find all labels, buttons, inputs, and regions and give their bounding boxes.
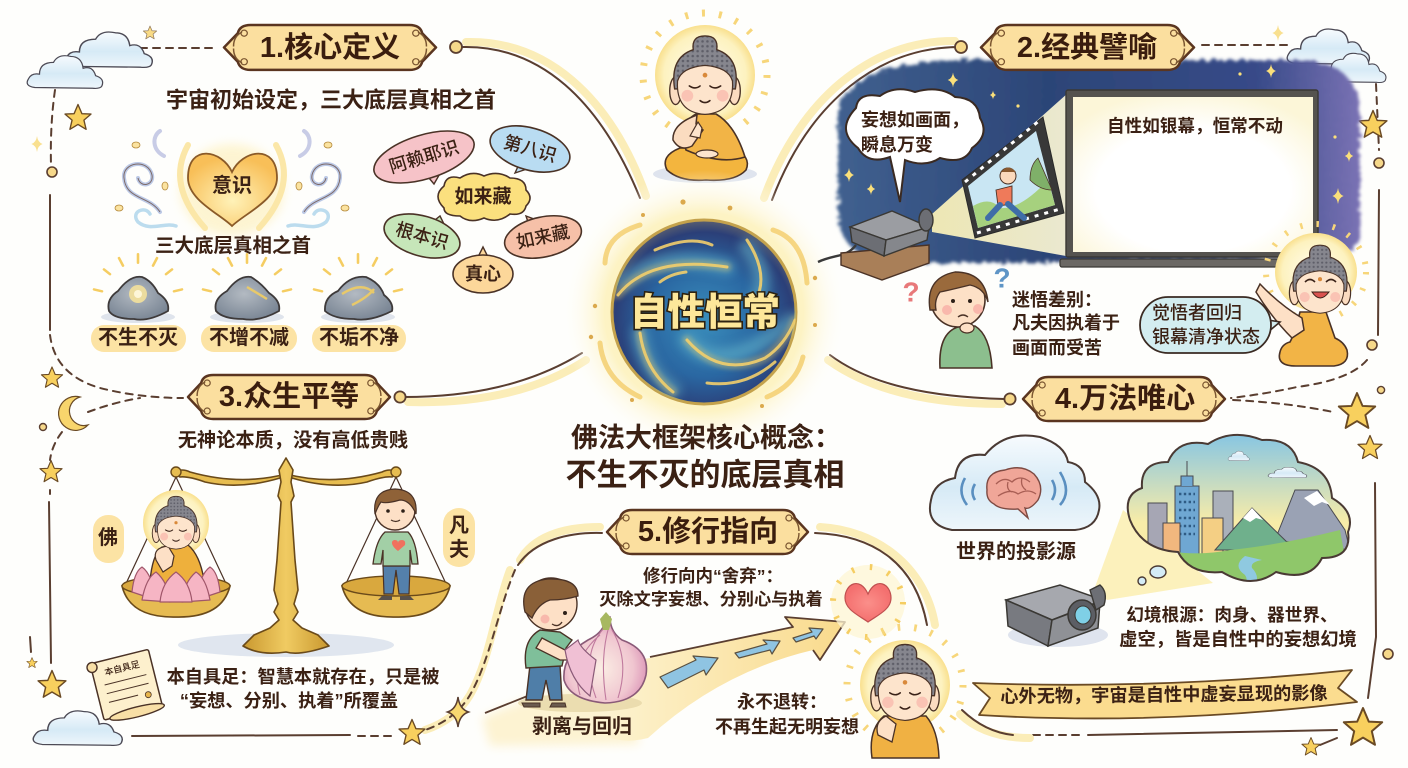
subtitle 1: 宇宙初始设定，三大底层真相之首 <box>166 88 496 112</box>
text: illusion source <box>1119 605 1357 650</box>
text: inward letting go: 灭除文字妄想、分别心与执着 <box>599 589 823 609</box>
label pills: 不增不减 <box>209 326 289 349</box>
subtitle 3: 无神论本质，没有高低贵贱 <box>178 428 408 452</box>
central orb: 自性恒常 <box>630 291 780 333</box>
projector light cone <box>932 93 1068 256</box>
text: innate wisdom: “妄想、分别、执着”所覆盖 <box>180 690 398 711</box>
projection screen: 自性如银幕，恒常不动 <box>1107 116 1283 136</box>
speech bubble: awakening: 觉悟者回归 <box>1152 303 1242 323</box>
label: peel and return: 剥离与回归 <box>532 714 632 738</box>
text: delusion vs awakening: 迷悟差别： <box>1012 289 1102 310</box>
main title <box>566 422 844 492</box>
label: ordinary person <box>443 508 475 567</box>
cloud with brain <box>930 435 1099 563</box>
projection beam <box>1095 510 1213 600</box>
speech bubble: delusion <box>846 89 984 202</box>
text: delusion vs awakening: 凡夫因执着于 <box>1012 312 1120 333</box>
text: innate wisdom: 本自具足：智慧本就存在，只是被 <box>167 666 439 687</box>
speech bubbles: names of self nature <box>368 118 585 293</box>
caption: 三大底层真相之首 <box>155 234 311 257</box>
main title: 佛法大框架核心概念： <box>571 422 841 453</box>
boy peeling onion <box>518 578 642 712</box>
text: delusion vs awakening: 画面而受苦 <box>1012 337 1102 358</box>
panel: classic metaphor <box>818 25 1366 368</box>
icon: golden heart with swirls: 意识 <box>212 173 252 197</box>
icon: top meditating Buddha <box>643 13 767 183</box>
big path arrow <box>604 617 845 741</box>
confused person <box>902 262 1011 368</box>
pointing Buddha <box>1256 224 1366 366</box>
speech bubbles: names of self nature: 根本识 <box>393 219 451 253</box>
speech bubbles: names of self nature: 阿赖耶识 <box>387 137 461 177</box>
cloud with brain: 世界的投影源 <box>956 540 1076 563</box>
bottom Buddha <box>847 627 963 758</box>
confused person: ? <box>902 276 920 308</box>
title: section 4 banner <box>1023 377 1225 421</box>
icon: golden heart with swirls <box>115 131 349 236</box>
text: illusion source: 幻境根源：肉身、器世界、 <box>1126 605 1338 625</box>
title: section 1 banner <box>224 25 436 70</box>
text: delusion vs awakening <box>1012 289 1120 358</box>
title: section 4 banner: 4.万法唯心 <box>1055 382 1195 415</box>
pan with ordinary person <box>342 489 450 617</box>
speech bubbles: names of self nature: 真心 <box>465 263 501 284</box>
icon: red heart <box>831 565 905 639</box>
text: non regression: 不再生起无明妄想 <box>715 716 859 737</box>
speech bubble: awakening <box>1140 297 1280 353</box>
panel: practice direction <box>482 565 963 758</box>
text: inward letting go <box>599 566 823 609</box>
text: illusion source: 虚空，皆是自性中的妄想幻境 <box>1119 628 1357 650</box>
projector <box>1006 585 1108 647</box>
label pills: 不生不灭 <box>98 326 178 349</box>
text: inward letting go: 修行向内“舍弃”： <box>643 566 783 586</box>
speech bubbles: names of self nature: 如来藏 <box>515 222 571 252</box>
icon: scroll <box>86 648 165 726</box>
label: Buddha <box>93 515 124 563</box>
panel: all dharmas are mind <box>930 435 1357 718</box>
arrow outline <box>485 617 845 713</box>
text: non regression <box>715 692 859 737</box>
label: ordinary person: 夫 <box>449 538 469 561</box>
title: section 1 banner: 1.核心定义 <box>260 31 400 64</box>
speech bubble: delusion: 瞬息万变 <box>861 134 933 155</box>
title: section 5 banner <box>607 510 808 554</box>
blue chevron arrows <box>660 628 823 688</box>
icon: onion <box>564 612 646 703</box>
title: section 2 banner: 2.经典譬喻 <box>1017 31 1157 64</box>
label pills: 不垢不净 <box>319 326 399 349</box>
title: section 2 banner <box>981 25 1194 70</box>
connector: centre to sections <box>394 41 1016 405</box>
rocks <box>94 254 402 323</box>
title: section 3 banner: 3.众生平等 <box>219 380 359 413</box>
speech bubbles: names of self nature: 如来藏 <box>454 186 512 208</box>
speech bubble: awakening: 银幕清净状态 <box>1152 327 1260 347</box>
ribbon banner: 心外无物，宇宙是自性中虚妄显现的影像 <box>1000 682 1328 707</box>
speech bubbles: names of self nature: 第八识 <box>501 132 559 166</box>
label: Buddha: 佛 <box>98 526 118 549</box>
ribbon banner <box>973 670 1357 718</box>
text: innate wisdom <box>167 666 439 711</box>
confused person: ? <box>993 262 1011 294</box>
main title: 不生不灭的底层真相 <box>566 458 844 492</box>
projection screen <box>1060 90 1318 267</box>
night sky backdrop <box>838 60 1360 264</box>
ground wash under the boy <box>482 668 660 746</box>
label: ordinary person: 凡 <box>449 515 469 537</box>
film strip with running man <box>962 117 1064 238</box>
panel: core definition <box>91 88 585 352</box>
title: section 5 banner: 5.修行指向 <box>638 515 778 548</box>
stars in the sky <box>844 64 1353 204</box>
label pills <box>91 325 406 352</box>
projector on stand <box>818 209 933 280</box>
text: non regression: 永不退转： <box>737 692 827 712</box>
central orb <box>572 172 836 438</box>
title: section 3 banner <box>188 375 390 419</box>
panel: equality of beings <box>86 428 475 726</box>
moon <box>59 396 88 430</box>
thought cloud landscape <box>1128 435 1350 590</box>
icon: scroll: 本自具足 <box>103 658 141 677</box>
balance scale <box>123 458 449 657</box>
pan with Buddha on lotus <box>122 490 230 617</box>
speech bubble: delusion: 妄想如画面， <box>861 109 969 130</box>
